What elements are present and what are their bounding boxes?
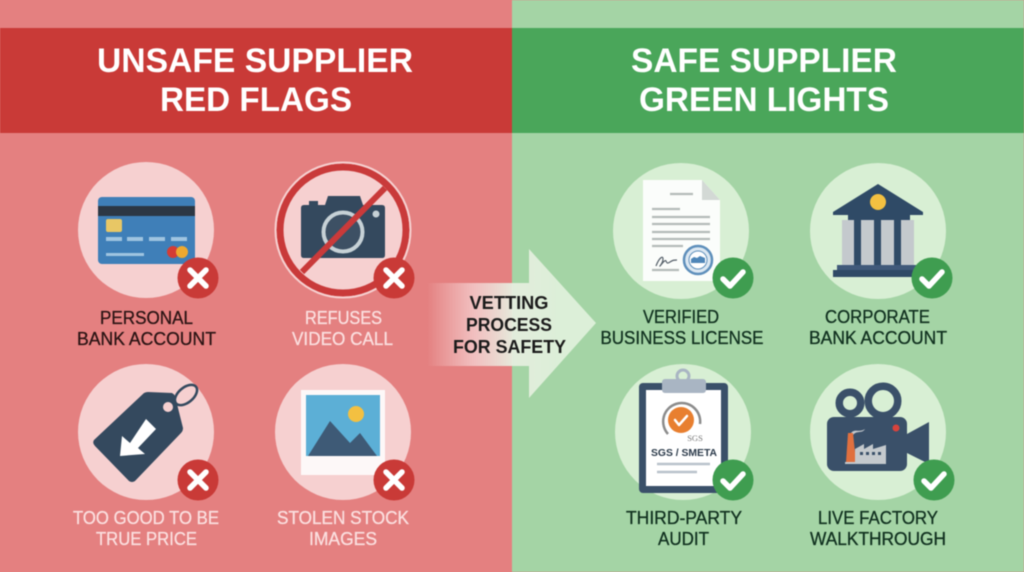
- heading: unsafe supplier red flags: [0, 28, 512, 133]
- label: live factory walkthrough: LIVE FACTORY: [818, 507, 938, 528]
- heading: safe supplier green lights: GREEN LIGHTS: [639, 81, 889, 119]
- icon: audit clipboard: SGS / SMETA: [651, 447, 717, 459]
- icon: audit clipboard: [639, 370, 728, 493]
- label: personal bank account: BANK ACCOUNT: [77, 328, 216, 349]
- icon: credit card: [98, 197, 195, 264]
- icon: license document: [643, 180, 720, 281]
- label: live factory walkthrough: [810, 507, 946, 549]
- item: refuses video call: [275, 162, 414, 349]
- label: refuses video call: [292, 307, 393, 349]
- badge: cross: [178, 258, 218, 298]
- icon: camera with prohibition sign: [276, 162, 410, 298]
- arrow: vetting process for safety: VETTING: [470, 293, 548, 313]
- label: live factory walkthrough: WALKTHROUGH: [810, 528, 946, 549]
- badge: check: [712, 460, 754, 500]
- badge: check: [912, 258, 952, 298]
- label: third-party audit: AUDIT: [658, 528, 709, 549]
- label: stolen stock images: IMAGES: [309, 528, 377, 549]
- badge: check: [712, 258, 754, 298]
- label: corporate bank account: [809, 306, 947, 348]
- item: too good to be true price: [73, 364, 219, 549]
- label: refuses video call: VIDEO CALL: [292, 328, 393, 349]
- icon: price tag with down arrow: [93, 381, 201, 482]
- item: verified business license: [600, 163, 764, 348]
- arrow: vetting process for safety: PROCESS: [466, 315, 552, 335]
- label: verified business license: BUSINESS LICENSE: [600, 327, 764, 348]
- item: personal bank account: [77, 162, 218, 349]
- item: corporate bank account: [809, 163, 952, 348]
- label: stolen stock images: STOLEN STOCK: [277, 507, 410, 528]
- heading: safe supplier green lights: SAFE SUPPLIER: [631, 42, 897, 80]
- heading: safe supplier green lights: [512, 28, 1024, 133]
- label: refuses video call: REFUSES: [305, 307, 382, 328]
- icon: video camera with factory: [827, 386, 929, 471]
- badge: check: [914, 460, 954, 500]
- label: personal bank account: [77, 307, 216, 349]
- label: too good to be true price: TOO GOOD TO BE: [73, 507, 219, 528]
- label: corporate bank account: CORPORATE: [825, 306, 930, 327]
- item: live factory walkthrough: [810, 364, 954, 549]
- item: third-party audit: [615, 364, 754, 549]
- label: too good to be true price: TRUE PRICE: [96, 528, 197, 549]
- label: third-party audit: [626, 507, 742, 549]
- icon: bank building: [833, 184, 923, 277]
- icon: audit clipboard: SGS: [687, 433, 703, 443]
- panel: green lights background: [512, 0, 1024, 572]
- arrow: vetting process for safety: [427, 249, 596, 398]
- label: corporate bank account: BANK ACCOUNT: [809, 327, 947, 348]
- label: stolen stock images: [277, 507, 410, 549]
- arrow: vetting process for safety: FOR SAFETY: [453, 337, 566, 357]
- badge: cross: [374, 258, 414, 298]
- label: verified business license: [600, 306, 764, 348]
- heading: unsafe supplier red flags: UNSAFE SUPPLIER: [97, 42, 413, 80]
- label: personal bank account: PERSONAL: [100, 307, 193, 328]
- badge: cross: [178, 460, 218, 500]
- label: too good to be true price: [73, 507, 219, 549]
- panel: red flags background: [0, 0, 512, 572]
- badge: cross: [374, 460, 414, 500]
- icon: photo print: [301, 390, 385, 475]
- label: verified business license: VERIFIED: [643, 306, 719, 327]
- heading: unsafe supplier red flags: RED FLAGS: [160, 81, 352, 119]
- item: stolen stock images: [275, 364, 414, 549]
- label: third-party audit: THIRD-PARTY: [626, 507, 742, 528]
